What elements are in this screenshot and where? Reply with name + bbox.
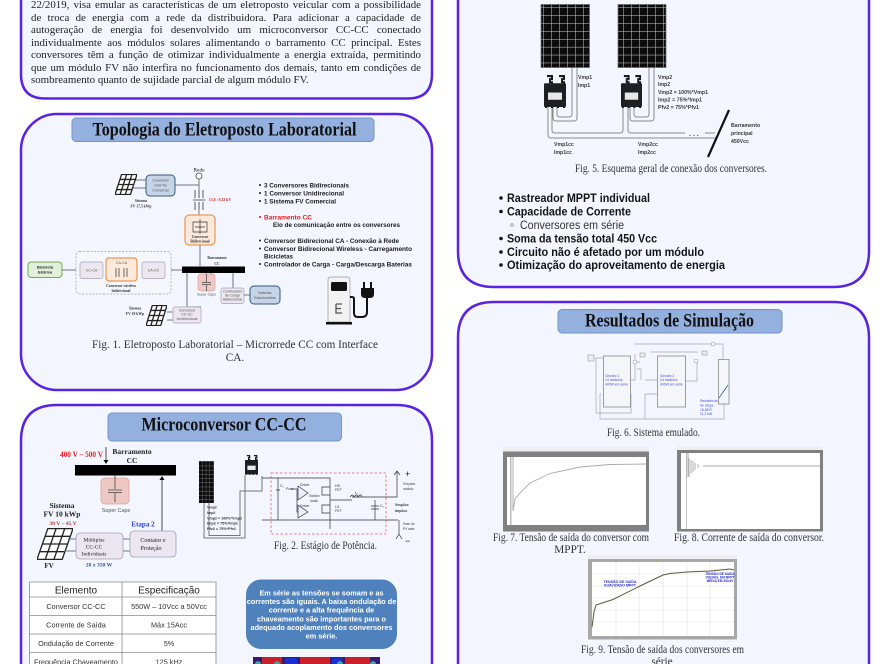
chart: estágio de potência: FET [335, 488, 343, 492]
chart: sistema emulado: 18,88 R [700, 408, 712, 412]
table: especificações: Corrente de Saída [46, 620, 107, 630]
chart: figure 8 current [677, 446, 823, 532]
list: características: Rastreador MPPT individual [507, 191, 650, 205]
chart: estágio de potência: − [405, 536, 410, 546]
box: super caps: Super Caps [197, 292, 216, 296]
box: grid-tie: Grid-Tie [154, 184, 167, 188]
box: baterias estacionárias: Baterias [258, 291, 272, 295]
heading: microconversor: Microconversor CC-CC [142, 416, 306, 436]
chart: figure 9 series voltage: MÉDIA EM 353,6V [707, 578, 734, 583]
chart: estágio de potência [199, 456, 415, 546]
box: super caps [197, 274, 216, 296]
icon: transformer [193, 190, 205, 210]
list: características: Circuito não é afetado por um módulo [507, 245, 704, 259]
chart: esquema de conexão: Vmp1 [578, 75, 592, 81]
chart: estágio de potência: módulo [403, 487, 414, 491]
chart: figure 9 series voltage: SUAVIZADO MPPT [604, 584, 637, 588]
icon: microconverter 2 [621, 76, 642, 109]
box: bicicleta elétrica: Elétrica [38, 270, 53, 274]
chart: microconverter topology: 400 V – 500 V [60, 450, 103, 459]
bar: barramento CC [75, 465, 176, 476]
box: contator e proteção: Contator e [140, 538, 166, 544]
bar: barramento CC [182, 266, 245, 273]
box: grid-tie: Conversor [152, 178, 170, 182]
heading: microconversor [108, 413, 342, 441]
box: controlador de carga: Controlador [223, 290, 243, 294]
chart: microconverter topology: Etapa 2 [131, 520, 155, 528]
panel: topologia do eletroposto [21, 114, 432, 390]
box: múltiplos CC-CC: CC-CC [86, 544, 103, 550]
box: conversor wireless [76, 252, 171, 294]
chart: microconverter topology: Sistema [50, 501, 75, 510]
table: especificações: Especificação [138, 586, 200, 596]
chart: estágio de potência: Imp2 [207, 511, 215, 515]
caption: figure 9 [581, 644, 744, 664]
callout: em série: correntes são iguais. A baixa ondulação de [247, 597, 396, 606]
chart: esquema de conexão: Imp2cc [638, 150, 656, 156]
chart: esquema de conexão: Vmp2 = 100%*Vmp1 [658, 90, 708, 96]
text block: topology bullets: 1 Sistema FV Comercial [264, 198, 336, 205]
callout: em série [246, 580, 397, 649]
box: conversor wireless: CA-CA [116, 261, 128, 265]
caption: figure 6: Fig. 6. Sistema emulado. [607, 427, 700, 439]
chart: esquema de conexão: Imp2 = 75%*Imp1 [658, 98, 702, 104]
chart: microrrede diagram [28, 168, 280, 326]
chart: esquema de conexão [541, 4, 760, 157]
chart: estágio de potência: Vmp2 = 100%*Vmp1 [207, 516, 242, 520]
box: controlador de carga: de Carga [225, 294, 240, 298]
table: especificações [30, 582, 216, 664]
box: conversor bidirecional [185, 215, 215, 245]
box: múltiplos CC-CC: Múltiplas [83, 538, 105, 544]
chart: esquema de conexão: Pfv2 = 75%*Pfv1 [658, 105, 699, 111]
chart: sistema emulado: 14 módulos [605, 378, 623, 382]
chart: figure 9 series voltage: TENSÃO DE SAÍDA [705, 571, 735, 576]
panel: conexão dos conversores [458, 0, 869, 287]
chart: sistema emulado: 400W em série [605, 382, 628, 386]
chart: sistema emulado: 400W em série [660, 382, 683, 386]
chart: estágio de potência: C₀ [380, 504, 385, 508]
chart: estágio de potência: Switch [309, 494, 320, 498]
list: características: Otimização do aproveitamento de energia [507, 258, 725, 272]
chart: estágio de potência: L₀ [355, 491, 359, 495]
box: conversor CC-CC unidirecional [173, 307, 201, 323]
caption: figure 1: CA. [226, 352, 244, 364]
text block: introduction paragraph: individualmente aos módulos solares alimentando o barramento CC principal. Estes [31, 36, 421, 48]
icon: microconverter [245, 456, 258, 476]
chart: estágio de potência: LS [335, 505, 340, 509]
box: conversor CC-CC unidirecional: CC-CC [181, 312, 193, 316]
icon: solar panel 10 kWp [146, 305, 167, 326]
box: múltiplos CC-CC: Individuais [82, 552, 106, 558]
chart: microrrede diagram: Barramento [207, 256, 227, 260]
table: especificações: 5% [164, 639, 175, 648]
callout: em série: adequado acoplamento dos conversores [251, 623, 392, 632]
box: controlador de carga [221, 288, 244, 304]
caption: figure 7: Fig. 7. Tensão de saída do conversor com [493, 532, 649, 544]
image: PCB board [253, 657, 380, 664]
chart: microrrede diagram: FV 10 kWp [126, 312, 144, 316]
text block: topology bullets: Bicicletas [264, 254, 293, 261]
chart: estágio de potência: Vmp2cc [395, 503, 409, 507]
chart: estágio de potência: Driver [300, 483, 310, 487]
chart: sistema emulado: de carga [700, 404, 713, 408]
chart: estágio de potência: FET [335, 509, 343, 513]
chart: esquema de conexão: principal [731, 131, 753, 137]
icon: charging station [326, 277, 374, 324]
chart: esquema de conexão: Imp1cc [554, 150, 572, 156]
box: baterias estacionárias [250, 286, 280, 304]
text block: introduction paragraph: autogeração de energia foi desenvolvido um microconversor CC-CC conectado [31, 24, 421, 36]
chart: estágio de potência: Driver [300, 504, 310, 508]
chart: microrrede diagram: Sistema [135, 199, 147, 203]
icon: solar panel [37, 529, 73, 559]
icon: microconverter 1 [544, 76, 566, 109]
chart: estágio de potência: Vsen do [403, 522, 415, 526]
box: conversor CC-CC unidirecional: Unidirecional [177, 317, 198, 321]
chart: figure 9 series voltage [588, 555, 737, 640]
chart: estágio de potência: Pfv2 = 75%*Pfv1 [207, 527, 236, 531]
box: conversor bidirecional: Conversor [192, 235, 209, 239]
panel: microconversor CC-CC [21, 405, 432, 664]
box: grid-tie: Comercial [152, 188, 169, 192]
chart: microconverter topology: FV [44, 562, 54, 570]
chart: estágio de potência: node [310, 499, 318, 503]
list: características: Capacidade de Corrente [507, 204, 631, 218]
text block: topology bullets: 3 Conversores Bidirecionais [264, 182, 349, 189]
panel: introduction [21, 0, 432, 98]
text block: introduction paragraph [31, 0, 421, 92]
table: especificações: Elemento [55, 586, 98, 596]
chart: estágio de potência: Vmp2 [207, 506, 217, 510]
chart: esquema de conexão: Vmp1cc [554, 142, 574, 148]
caption: figure 1: Fig. 1. Eletroposto Laboratorial – Microrrede CC com Interface [92, 339, 378, 351]
text block: topology bullets: Elo de comunicação entre os conversores [273, 222, 400, 229]
caption: figure 7 [493, 532, 649, 556]
list: características: Conversores em série [520, 220, 624, 232]
caption: figure 1 [92, 339, 378, 364]
box: bicicleta elétrica: Bicicleta [37, 264, 54, 270]
chart: estágio de potência: Vst para [403, 482, 415, 486]
chart: microrrede diagram: Rede [193, 168, 205, 174]
box: múltiplos CC-CC [76, 533, 123, 559]
table: especificações: Ondulação de Corrente [38, 639, 114, 648]
chart: estágio de potência: C₁ [280, 484, 285, 488]
list: características [499, 191, 725, 272]
chart: microrrede diagram: FV 17,5 kWp [131, 204, 151, 208]
callout: em série: Em série as tensões se somam e as [259, 588, 384, 598]
list: características: Soma da tensão total 450 Vcc [507, 232, 657, 246]
icon: solar panel 17,5 kWp [115, 174, 137, 195]
chart: microrrede diagram: CC [214, 262, 220, 266]
chart: esquema de conexão: Barramento [731, 123, 760, 129]
text block: topology bullets: Conversor Bidirecional CA - Conexão à Rede [264, 238, 399, 245]
box: conversor CC-CC unidirecional: Conversor [179, 308, 196, 312]
text block: introduction paragraph: de troca de energia com a rede da distribuidora. Para adicionar a capacidade de [31, 12, 421, 24]
callout: em série: em série. [306, 632, 337, 640]
chart: microconverter topology: FV 10 kWp [44, 510, 80, 518]
chart: esquema de conexão: . . . [689, 131, 699, 138]
table: especificações: Máx 15Acc [151, 620, 187, 630]
text block: introduction paragraph: sombreamento quanto de sujidade parcial de algum módulo FV. [31, 74, 309, 86]
chart: estágio de potência: + [405, 469, 410, 479]
box: conversor wireless: CA-CC [148, 268, 160, 272]
chart: estágio de potência: Imp2 = 75%*Imp1 [207, 522, 238, 526]
caption: figure 5: Fig. 5. Esquema geral de conexão dos conversores. [575, 163, 767, 175]
chart: microrrede diagram: 13,8 : 0,22 kV [209, 198, 231, 202]
chart: sistema emulado: 11,2 kW [700, 412, 713, 416]
chart: microrrede diagram: Sistema [129, 306, 141, 310]
table: especificações: 550W – 10Vcc a 50Vcc [131, 602, 207, 611]
chart: microconverter topology: CC [127, 456, 137, 465]
chart: estágio de potência: Pout [286, 487, 293, 491]
text block: topology bullets [259, 182, 412, 268]
heading: topologia: Topologia do Eletroposto Laboratorial [92, 120, 356, 140]
chart: esquema de conexão: Vmp2cc [638, 142, 658, 148]
chart: estágio de potência: HS [335, 484, 341, 488]
chart: esquema de conexão: 450Vcc [731, 139, 749, 145]
chart: sistema emulado: Circuito 1 [605, 374, 619, 378]
text block: topology bullets: Controlador de Carga - Carga/Descarga Baterias [264, 261, 412, 268]
box: conversor wireless: bidirecional [112, 289, 130, 293]
box: bicicleta elétrica [28, 262, 62, 278]
text block: topology bullets: Conversor Bidirecional Wireless - Carregamento [264, 246, 412, 253]
caption: figure 7: MPPT. [554, 544, 586, 556]
table: especificações: Conversor CC-CC [46, 602, 106, 611]
icon: solar panel 1 [541, 4, 590, 68]
chart: figure 9 series voltage: VISUAIS. EM MPPT [705, 576, 735, 580]
caption: figure 9: Fig. 9. Tensão de saída dos conversores em [581, 644, 744, 656]
box: grid-tie [146, 175, 175, 196]
chart: esquema de conexão: Imp1 [578, 83, 590, 89]
text block: topology bullets: 1 Conversor Unidirecional [264, 190, 344, 197]
chart: figure 7 voltage [503, 446, 649, 532]
panel: resultados de simulação [458, 302, 869, 664]
chart: estágio de potência: PV ante [403, 527, 415, 531]
chart: estágio de potência: Imp2cc [395, 509, 407, 513]
chart: sistema emulado: Circuito 2 [660, 374, 674, 378]
box: conversor wireless: Conversor wireless [106, 284, 136, 288]
heading: resultados: Resultados de Simulação [585, 312, 754, 332]
callout: em série: chaveamento são importantes para o [257, 614, 387, 624]
text block: introduction paragraph: que um módulo FV não interfira no funcionamento dos demais, tanto em condições de [31, 62, 421, 74]
chart: sistema emulado: 14 módulos [660, 378, 678, 382]
chart: sistema emulado: Resistência [700, 399, 718, 403]
box: baterias estacionárias: Estacionárias [254, 296, 276, 300]
chart: microconverter topology: 28 x 350 W [86, 562, 113, 568]
box: super caps: Super Caps [102, 508, 131, 514]
box: conversor wireless: CC-CA [86, 268, 98, 272]
caption: figure 2: Fig. 2. Estágio de Potência. [274, 540, 377, 552]
caption: figure 8: Fig. 8. Corrente de saída do conversor. [674, 532, 824, 544]
icon: solar panel 2 [618, 4, 666, 68]
chart: sistema emulado [588, 342, 729, 419]
chart: figure 9 series voltage: TENSÃO DE SAÍDA [603, 579, 637, 584]
box: conversor bidirecional: Bidirecional [190, 240, 210, 244]
callout: em série: corrente e a alta frequência de [269, 606, 374, 614]
box: controlador de carga: Bidirecional [223, 298, 242, 302]
box: contator e proteção: Proteção [140, 546, 162, 552]
box: contator e proteção [130, 531, 176, 557]
chart: esquema de conexão: Imp2 [658, 82, 670, 88]
chart: microconverter topology: Barramento [112, 447, 152, 456]
text block: introduction paragraph: conversores têm a função de otimizar individualmente a energia extraída, permitindo [31, 49, 421, 61]
chart: microconverter topology [37, 447, 176, 570]
chart: microconverter topology: 30 V – 45 V [49, 521, 77, 527]
text block: topology bullets: Barramento CC [264, 214, 312, 221]
chart: esquema de conexão: Vmp2 [658, 75, 672, 81]
